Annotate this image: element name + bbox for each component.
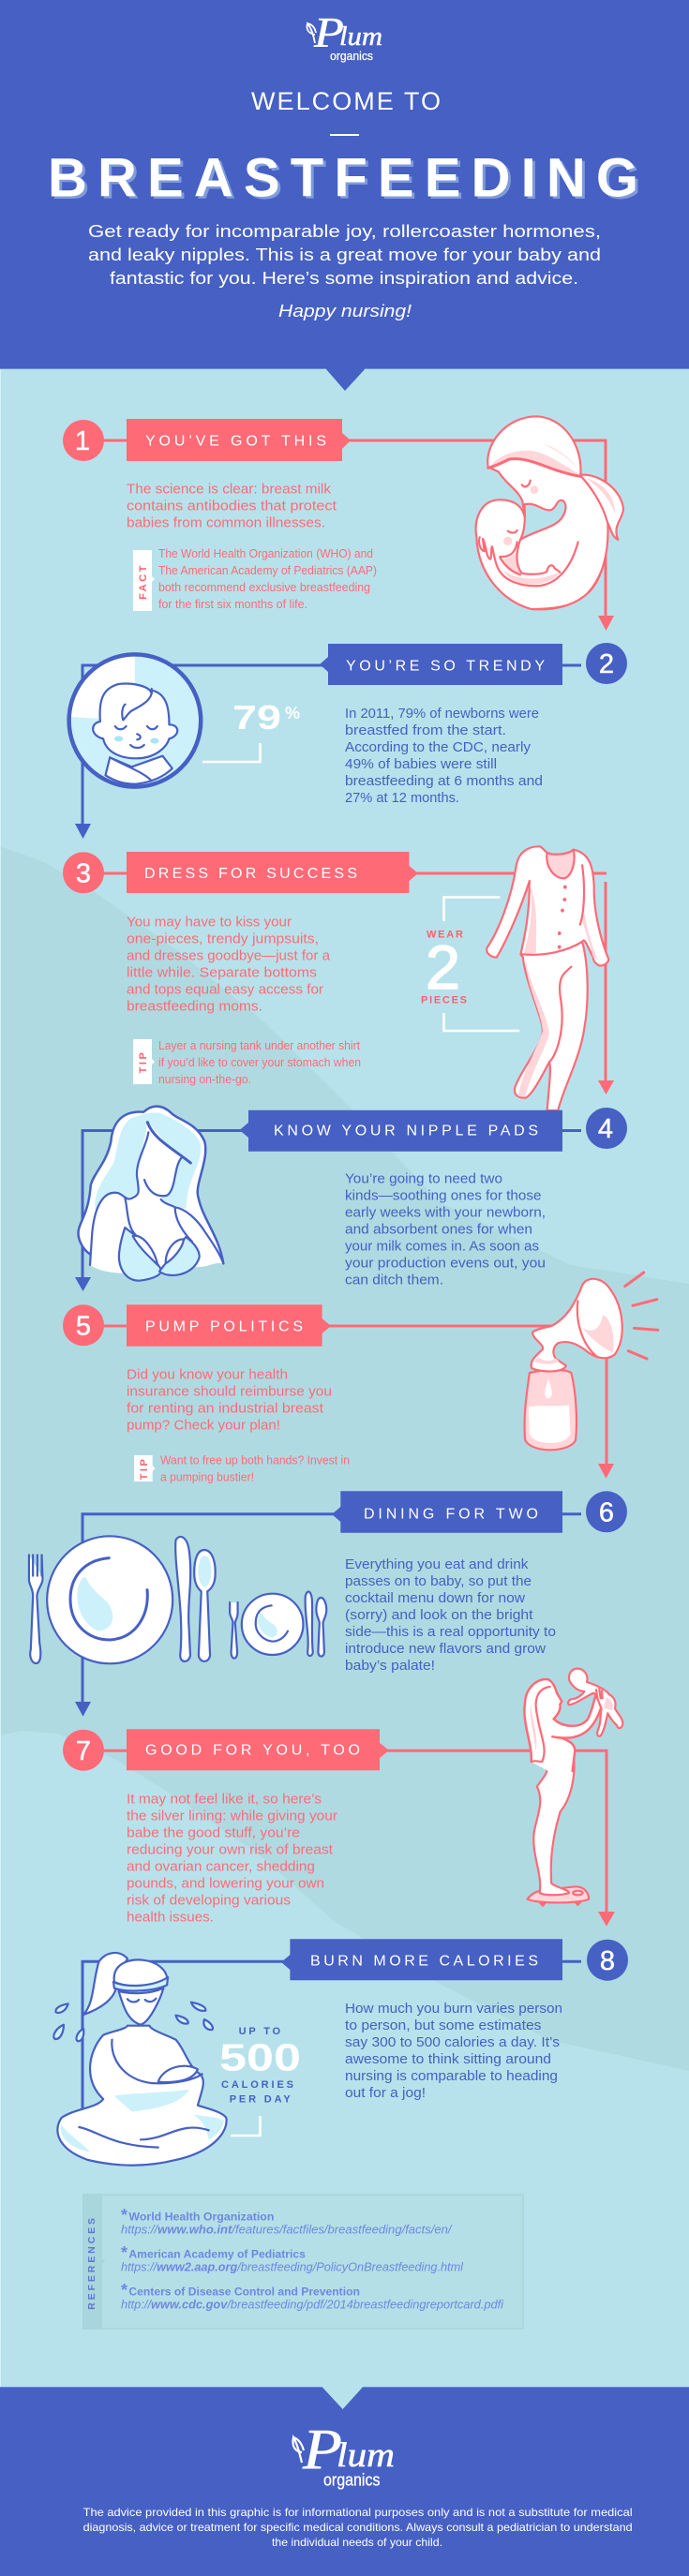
number badge 1 — [63, 420, 104, 461]
fact callout: The American Academy of Pediatrics (AAP) — [158, 564, 377, 577]
number badge 6 — [586, 1491, 627, 1532]
body text: side—this is a real opportunity to — [345, 1625, 556, 1640]
ribbon heading — [281, 1939, 562, 1980]
body text: the silver lining: while giving your — [127, 1809, 337, 1824]
ribbon heading — [240, 1110, 562, 1152]
fact callout — [133, 547, 377, 611]
body text: (sorry) and look on the bright — [345, 1608, 532, 1623]
illustration: woman on a scale lifting baby — [524, 1669, 622, 1907]
logo: Plum Organics: lum — [337, 2436, 395, 2475]
body text: You’re going to need two — [345, 1172, 502, 1187]
reference: CDC: Centers of Disease Control and Prevention — [128, 2285, 360, 2298]
number badge 1: 1 — [75, 426, 90, 456]
reference: WHO: * — [121, 2206, 127, 2225]
stat: up to 500 calories per day: UP TO — [239, 2026, 281, 2037]
number badge 8: 8 — [600, 1946, 615, 1976]
connector arrow 3 to 4 — [94, 873, 614, 1094]
intro text: fantastic for you. Here’s some inspiration and advice. — [110, 269, 578, 288]
reference: AAP — [121, 2243, 464, 2273]
fact callout: for the first six months of life. — [158, 598, 307, 611]
number badge 5 — [63, 1304, 104, 1346]
body text: babe the good stuff, you’re — [127, 1826, 300, 1841]
large spoon — [194, 1550, 216, 1661]
number badge 6: 6 — [599, 1497, 614, 1527]
reference: CDC: * — [121, 2281, 127, 2300]
body text: cocktail menu down for now — [345, 1591, 526, 1606]
body text — [127, 916, 331, 1015]
connector arrow 1 to 2 — [94, 440, 614, 631]
body text: can ditch them. — [345, 1273, 443, 1288]
disclaimer text: the individual needs of your child. — [272, 2536, 442, 2549]
connector arrow 4 to 5 — [75, 1130, 581, 1291]
reference: CDC: http://www.cdc.gov/breastfeeding/pdf/2014breastfeedingreportcard.pdfi — [121, 2298, 504, 2311]
body text: and dresses goodbye—just for a — [127, 949, 331, 964]
large plate — [47, 1536, 172, 1663]
body text: You may have to kiss your — [127, 916, 292, 931]
number badge 7: 7 — [76, 1736, 91, 1766]
large knife — [175, 1537, 190, 1661]
small plate — [242, 1594, 303, 1655]
body text: early weeks with your newborn, — [345, 1206, 546, 1221]
number badge 3 — [63, 852, 104, 893]
ribbon heading — [127, 1729, 389, 1770]
ribbon heading: PUMP POLITICS — [145, 1319, 303, 1334]
body text: introduce new flavors and grow — [345, 1642, 547, 1657]
number badge 8 — [587, 1940, 628, 1981]
tip callout — [134, 1453, 350, 1483]
stat: 79%: 79 — [232, 698, 281, 737]
body text: pounds, and lowering your own — [127, 1877, 324, 1892]
fact callout: both recommend exclusive breastfeeding — [158, 581, 370, 594]
section 2: you're so trendy — [69, 643, 627, 839]
ribbon heading: YOU’RE SO TRENDY — [346, 658, 545, 675]
body text: kinds—soothing ones for those — [345, 1189, 542, 1204]
body text: In 2011, 79% of newborns were — [345, 707, 539, 722]
reference: AAP: https://www2.aap.org/breastfeeding/PolicyOnBreastfeeding.html — [121, 2260, 464, 2273]
section 7: good for you, too — [63, 1669, 622, 1927]
number badge 5: 5 — [76, 1312, 91, 1342]
reference: AAP: * — [121, 2243, 127, 2262]
number badge 4: 4 — [598, 1114, 613, 1144]
sign-off: happy nursing: Happy nursing! — [278, 302, 412, 320]
small fork — [230, 1602, 238, 1659]
body text: nursing is comparable to heading — [345, 2069, 558, 2084]
body text: According to the CDC, nearly — [345, 740, 532, 755]
logo: Plum Organics: P — [313, 8, 344, 56]
intro text — [88, 222, 601, 288]
body text: Did you know your health — [127, 1368, 288, 1383]
stat: up to 500 calories per day: 500 — [219, 2035, 301, 2078]
stat: up to 500 calories per day: PER DAY — [230, 2093, 291, 2105]
stat: 79% — [202, 698, 300, 762]
tip callout: TIP — [138, 1050, 149, 1073]
illustration: place settings — [29, 1536, 326, 1663]
body text: breastfed from the start. — [345, 723, 506, 738]
footer banner — [0, 2387, 689, 2576]
body text: Everything you eat and drink — [345, 1557, 529, 1572]
body text: contains antibodies that protect — [127, 499, 337, 514]
stat: wear 2 pieces — [421, 898, 519, 1031]
heading divider — [330, 134, 359, 136]
stat: wear 2 pieces: PIECES — [421, 995, 467, 1006]
illustration: woman with nipple pads — [79, 1107, 223, 1281]
body text: out for a jog! — [345, 2086, 426, 2101]
ribbon heading: BURN MORE CALORIES — [310, 1953, 538, 1970]
illustration: breast pump and bottle — [525, 1273, 658, 1450]
illustration: woman nursing with sweat drops — [53, 1953, 227, 2166]
connector arrow 5 to 6 — [94, 1326, 614, 1479]
logo: Plum Organics: P — [302, 2420, 342, 2481]
body text — [127, 1368, 332, 1434]
number badge 3: 3 — [76, 858, 91, 888]
disclaimer text: diagnosis, advice or treatment for specific medical conditions. Always consult a pediatrician to understand — [83, 2521, 633, 2534]
section 8: burn more calories — [53, 1939, 628, 2166]
stat: wear 2 pieces: WEAR — [427, 930, 463, 941]
body text: health issues. — [127, 1911, 214, 1926]
body text: reducing your own risk of breast — [127, 1843, 333, 1858]
heading: welcome to: WELCOME TO — [251, 87, 441, 115]
body text: 27% at 12 months. — [345, 791, 459, 806]
bathroom scale and legs — [527, 1757, 589, 1907]
number badge 2: 2 — [599, 649, 614, 679]
stat: up to 500 calories per day: CALORIES — [221, 2079, 293, 2091]
small knife and spoon — [306, 1592, 326, 1657]
ribbon heading: GOOD FOR YOU, TOO — [145, 1743, 360, 1758]
ribbon heading: YOU’VE GOT THIS — [145, 433, 326, 450]
ribbon heading: DINING FOR TWO — [364, 1507, 538, 1522]
logo: Plum Organics: organics — [323, 2471, 381, 2490]
ribbon heading: DRESS FOR SUCCESS — [144, 866, 357, 882]
section 1: you've got this — [63, 416, 623, 631]
stat: wear 2 pieces: 2 — [426, 932, 460, 1002]
body text: babies from common illnesses. — [127, 516, 325, 531]
ribbon heading — [127, 1304, 331, 1347]
logo: Plum Organics — [292, 2420, 395, 2490]
body text: baby’s palate! — [345, 1659, 435, 1674]
stat: up to 500 calories per day — [219, 2026, 301, 2136]
large fork — [29, 1555, 42, 1663]
title: breastfeeding: BREASTFEEDING — [51, 150, 641, 211]
connector arrow 2 to 3 — [75, 665, 581, 839]
intro text: Get ready for incomparable joy, rollercoaster hormones, — [88, 222, 601, 241]
number badge 2 — [586, 643, 627, 684]
body text: pump? Check your plan! — [127, 1419, 280, 1434]
reference: WHO — [121, 2206, 453, 2236]
tip callout: Want to free up both hands? Invest in — [160, 1453, 350, 1467]
logo: Plum Organics: lum — [339, 22, 382, 52]
reference: CDC — [121, 2281, 504, 2311]
ribbon heading — [332, 1491, 562, 1533]
tip callout: if you’d like to cover your stomach when — [158, 1056, 361, 1069]
body text: passes on to baby, so put the — [345, 1574, 532, 1589]
tip callout: Layer a nursing tank under another shirt — [158, 1039, 361, 1052]
header banner — [0, 0, 689, 391]
section 5: pump politics — [63, 1273, 658, 1483]
body text: The science is clear: breast milk — [127, 483, 332, 498]
tip callout: a pumping bustier! — [160, 1470, 254, 1483]
panel: references: REFERENCES — [86, 2215, 97, 2310]
reference: AAP: American Academy of Pediatrics — [128, 2247, 306, 2260]
stat: 79%: % — [285, 704, 300, 722]
disclaimer text — [83, 2506, 633, 2549]
body text — [345, 707, 543, 806]
body text: awesome to think sitting around — [345, 2052, 551, 2067]
body text — [345, 1557, 556, 1674]
tip callout: nursing on-the-go. — [158, 1073, 251, 1086]
tip callout: TIP — [139, 1457, 150, 1480]
number badge 4 — [586, 1108, 627, 1149]
connector arrow 6 to 7 — [75, 1514, 581, 1717]
body text: risk of developing various — [127, 1894, 291, 1909]
panel: references — [82, 2194, 523, 2330]
body text: 49% of babies were still — [345, 757, 497, 772]
body text — [127, 483, 337, 531]
connector arrow 7 to 8 — [94, 1750, 615, 1927]
reference: WHO: https://www.who.int /features/factfiles/breastfeeding/facts/en/ — [121, 2223, 453, 2236]
woman upper body and baby — [524, 1669, 622, 1771]
body text: breastfeeding moms. — [127, 1000, 262, 1015]
logo: Plum Organics — [307, 8, 382, 63]
section 3: dress for success — [63, 846, 614, 1110]
section 4: know your nipple pads — [75, 1107, 627, 1291]
body text: and absorbent ones for when — [345, 1223, 532, 1238]
disclaimer text: The advice provided in this graphic is for informational purposes only and is not a substitute for medical — [83, 2506, 633, 2519]
logo: Plum Organics: organics — [330, 49, 373, 63]
ribbon heading — [127, 852, 418, 893]
body text: and tops equal easy access for — [127, 983, 323, 998]
ribbon heading — [127, 419, 351, 461]
tip callout — [133, 1039, 361, 1086]
ribbon heading — [320, 644, 562, 685]
intro text: and leaky nipples. This is a great move for your baby and — [88, 246, 601, 264]
section 6: dining for two — [29, 1491, 627, 1717]
illustration: two-piece pajamas — [487, 846, 608, 1110]
body text: say 300 to 500 calories a day. It’s — [345, 2035, 560, 2050]
body text — [127, 1793, 337, 1926]
body text — [345, 2002, 562, 2101]
title: breastfeeding: BREASTFEEDING — [48, 148, 638, 208]
connector line 8 — [82, 1961, 581, 2110]
illustration: mother cradling baby — [476, 416, 623, 609]
fact callout: The World Health Organization (WHO) and — [158, 547, 373, 560]
body text: insurance should reimburse you — [127, 1385, 332, 1400]
body text: for renting an industrial breast — [127, 1402, 323, 1417]
body text: breastfeeding at 6 months and — [345, 774, 543, 789]
body text: It may not feel like it, so here’s — [127, 1793, 322, 1808]
body text: one-pieces, trendy jumpsuits, — [127, 932, 319, 947]
number badge 7 — [63, 1730, 104, 1771]
fact callout: FACT — [138, 563, 149, 600]
bra cups with pads — [119, 1228, 200, 1281]
body text: and ovarian cancer, shedding — [127, 1860, 315, 1875]
ribbon heading: KNOW YOUR NIPPLE PADS — [274, 1123, 538, 1139]
body text — [345, 1172, 546, 1288]
body text: your production evens out, you — [345, 1257, 546, 1272]
body text: How much you burn varies person — [345, 2002, 562, 2017]
body text: to person, but some estimates — [345, 2018, 542, 2033]
body text: your milk comes in. As soon as — [345, 1240, 539, 1255]
illustration: baby in pie-chart medallion — [69, 654, 201, 787]
body text: little while. Separate bottoms — [127, 966, 317, 981]
reference: WHO: World Health Organization — [128, 2210, 274, 2223]
